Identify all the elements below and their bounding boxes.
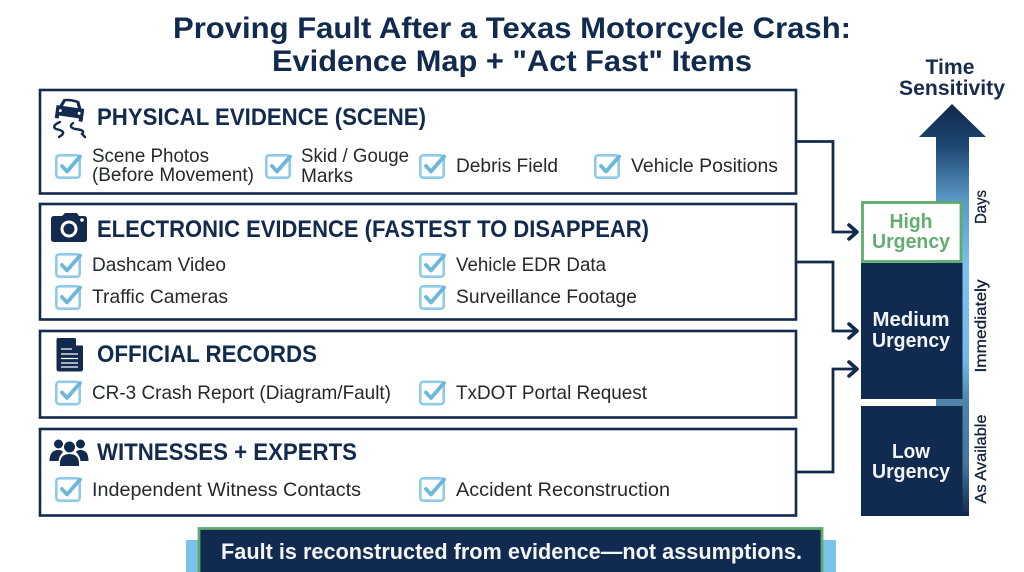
scale label: as available: As Available [973, 414, 990, 504]
callout: key takeaway: Fault is reconstructed from evidence—not assumptions. [221, 539, 802, 564]
panel: witnesses and experts [40, 429, 796, 516]
urgency: medium [861, 263, 962, 399]
checklist: witnesses and experts items: Independent Witness Contacts [92, 479, 361, 501]
urgency: medium: Urgency [872, 329, 951, 352]
icon: people group [50, 440, 88, 466]
icon: camera [51, 213, 87, 242]
panel: witnesses and experts: WITNESSES + EXPERTS [97, 439, 357, 466]
checklist: witnesses and experts items: Accident Reconstruction [456, 479, 670, 501]
time sensitivity label: Sensitivity [899, 77, 1005, 100]
checklist: physical evidence items: Debris Field [456, 155, 558, 177]
title: Proving Fault After a Texas Motorcycle Crash: [173, 12, 851, 45]
time sensitivity label [899, 56, 1005, 100]
arrow: electronic evidence to medium urgency [797, 262, 857, 338]
arrow: physical evidence to high urgency [797, 142, 857, 239]
checklist: electronic evidence items: Dashcam Video [92, 254, 226, 276]
checklist: physical evidence items: Skid / Gouge [301, 145, 409, 167]
urgency: medium: Medium [872, 308, 950, 331]
checklist: physical evidence items: Marks [301, 165, 353, 187]
panel: official records [40, 331, 796, 418]
urgency: high: High [890, 210, 932, 233]
checklist: physical evidence items: (Before Movement) [92, 164, 254, 186]
panel: official records: OFFICIAL RECORDS [97, 341, 317, 368]
icon: document [56, 338, 83, 372]
title [173, 12, 851, 78]
checklist: physical evidence items: Vehicle Positions [631, 155, 778, 177]
urgency: high [862, 202, 961, 262]
checklist: official records items: TxDOT Portal Request [456, 382, 648, 404]
checklist: official records items [56, 382, 648, 404]
scale label: days: Days [973, 190, 990, 224]
scale label: immediately: Immediately [973, 279, 990, 372]
checklist: electronic evidence items: Surveillance Footage [456, 286, 637, 308]
icon: skidding car [54, 97, 85, 137]
checklist: electronic evidence items [56, 254, 637, 309]
checklist: electronic evidence items: Traffic Cameras [92, 286, 228, 308]
callout: key takeaway [186, 528, 836, 572]
checklist: witnesses and experts items [56, 478, 670, 501]
title: Evidence Map + "Act Fast" Items [272, 45, 752, 78]
panel: electronic evidence [40, 204, 796, 320]
arrow: time sensitivity axis [919, 104, 986, 516]
urgency: low [861, 406, 962, 516]
panel: physical evidence [40, 90, 796, 194]
checklist: physical evidence items: Scene Photos [92, 145, 209, 167]
panel: physical evidence: PHYSICAL EVIDENCE (SCENE) [97, 104, 426, 131]
urgency: low: Urgency [872, 460, 951, 483]
checklist: official records items: CR-3 Crash Report (Diagram/Fault) [92, 382, 391, 404]
urgency: low: Low [892, 440, 930, 463]
checklist: physical evidence items [56, 145, 778, 187]
panel: electronic evidence: ELECTRONIC EVIDENCE (FASTEST TO DISAPPEAR) [97, 216, 649, 243]
time sensitivity label: Time [926, 56, 974, 79]
checklist: electronic evidence items: Vehicle EDR Data [456, 254, 606, 276]
arrow: witnesses and experts to medium urgency [797, 362, 857, 472]
urgency: high: Urgency [872, 230, 951, 253]
